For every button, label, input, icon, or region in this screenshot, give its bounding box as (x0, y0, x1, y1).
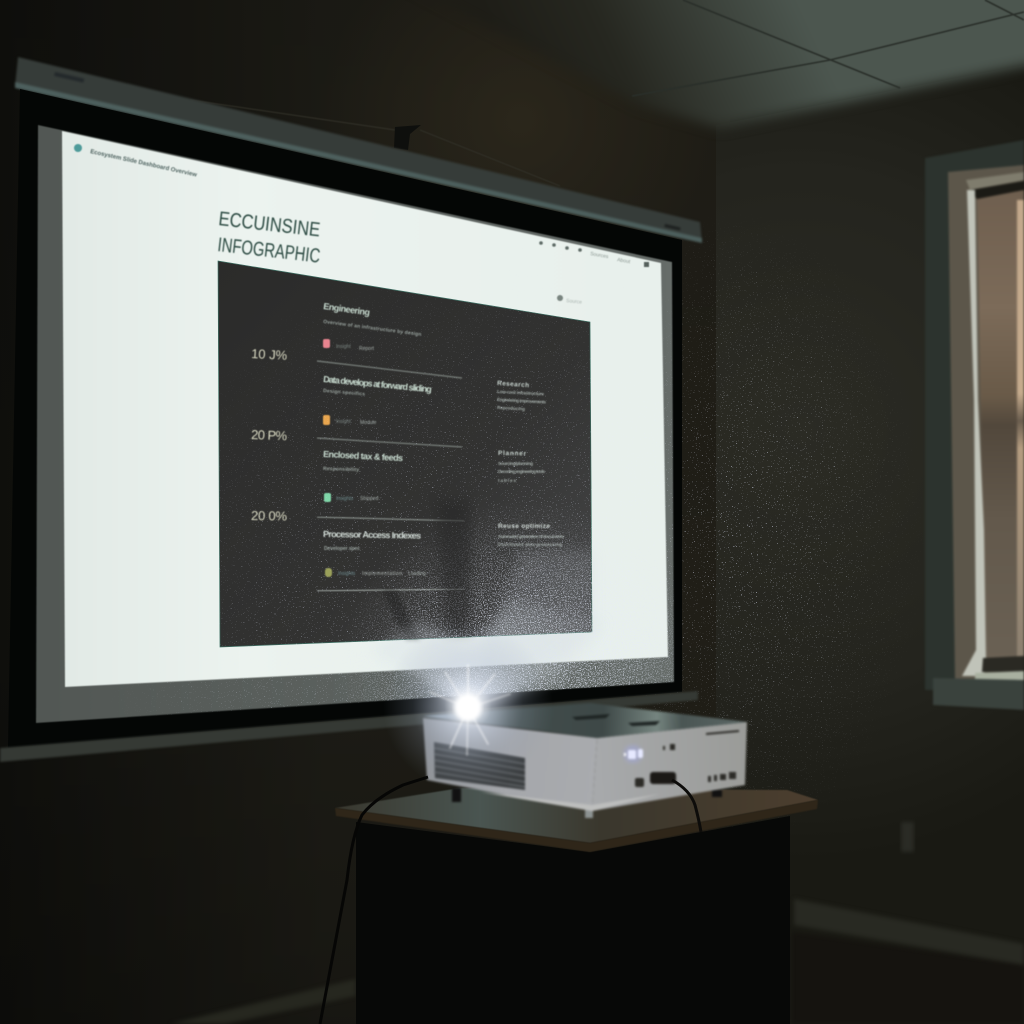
screen: roller case (15, 57, 702, 243)
power cable right (672, 780, 701, 832)
projector: top (423, 703, 748, 738)
panel tag: Source (566, 298, 582, 306)
table (335, 788, 818, 1024)
panel: right column note 1: Low-cost infrastructure (497, 389, 545, 396)
panel: row 3: Shipped (360, 496, 379, 502)
panel: right column note 1: Research (497, 380, 529, 389)
panel: row 3 (323, 449, 403, 502)
panel: left percentages: 20 P% (251, 427, 288, 443)
panel: divider 4 (317, 589, 464, 591)
panel: row 1: Report (359, 346, 375, 352)
panel: row 4: Insights (338, 571, 356, 577)
panel: row 2 (323, 374, 432, 426)
light beam fan (370, 550, 610, 708)
panel: row 4: Processor Access Indexes (323, 529, 421, 541)
panel: row 2: Insight (336, 419, 351, 425)
panel: right column note 1 (497, 380, 547, 411)
page title: ECCUINSINE (217, 208, 321, 242)
panel: row 4 (323, 529, 426, 577)
ceiling with tile grid (380, 0, 1024, 128)
panel: row 2: Module (360, 420, 377, 426)
page nav (539, 241, 649, 267)
projector (423, 703, 748, 818)
panel tag (557, 295, 582, 306)
projector: status LEDs (624, 745, 643, 763)
panel: right column note 1: Engineering improvements (497, 397, 547, 405)
projector: rear ports (635, 730, 739, 787)
table: front edge (335, 800, 818, 852)
lens flare (383, 621, 553, 791)
panel: row 1: Insight (336, 344, 351, 350)
table: cabinet base (356, 816, 790, 1024)
table: top (335, 788, 818, 843)
projector: feet (452, 788, 722, 818)
dark data panel (218, 261, 592, 647)
window: sill (933, 678, 1024, 710)
panel: right column note 2: Decoding engineering tools (498, 469, 545, 474)
panel: row 4: Loading (408, 571, 426, 577)
projector: bottom lip (480, 792, 660, 811)
panel: right column note 3: Distributed data processing (498, 542, 562, 547)
screen: grey surface (36, 125, 674, 723)
screen: lower bar (0, 691, 698, 762)
window: head rail (966, 172, 1024, 199)
panel: row 2: Design specifics (323, 388, 365, 398)
window: bottom rail (982, 656, 1024, 672)
left wall (0, 0, 730, 1024)
window: white strip (962, 190, 986, 676)
page nav: Sources (590, 251, 609, 260)
panel: row 2: Data develops at forward sliding (323, 374, 432, 394)
panel: row 1: Overview of an infrastructure by design (323, 319, 422, 338)
wall outlet (901, 822, 914, 852)
right wall (716, 65, 1024, 1024)
panel: divider 2 (317, 438, 462, 447)
panel: left percentages: 20 0% (251, 508, 288, 524)
panel: row 3: Responsibility (323, 466, 359, 473)
panel: right column note 2: Planner (498, 450, 527, 457)
panel: right column note 2 (498, 450, 545, 483)
panel: right column note 3: Automated generation of documents (498, 534, 564, 539)
panel: row 4: Implementation (362, 571, 402, 577)
projector: top slits (572, 714, 660, 726)
power cable left (320, 777, 428, 1024)
panel: right column note 3 (498, 523, 564, 547)
panel: left percentages: 10 J% (251, 346, 288, 363)
projector: right face (592, 722, 747, 811)
dust stippling on projected panel (124, 288, 674, 716)
mounting bracket and cables (190, 100, 560, 186)
panel: right column note 2: tables (498, 478, 516, 483)
speckled dust on walls (620, 224, 917, 826)
panel: divider 3 (317, 517, 464, 521)
panel: right column note 2: Sourcing/planning (498, 461, 533, 466)
panel: left percentages (251, 346, 288, 524)
window (925, 140, 1024, 710)
panel: row 4: Developer spec (324, 546, 360, 552)
panel: row 1: Engineering (323, 301, 371, 318)
projection screen (0, 57, 702, 762)
page title: INFOGRAPHIC (216, 234, 321, 268)
projector: left face (423, 718, 597, 811)
projector: vent grille (434, 742, 525, 790)
screen: black border (8, 89, 682, 748)
panel: divider 1 (317, 361, 462, 378)
screen: projected white page (62, 131, 668, 687)
page nav: About (617, 257, 631, 265)
panel: row 3: Enclosed tax & feeds (323, 449, 403, 463)
page title (216, 208, 321, 268)
panel: right column note 3: Reuse optimize (498, 523, 550, 530)
window: inner casing (948, 165, 1024, 680)
window: roller blind (977, 182, 1024, 670)
baseboards and floor (170, 899, 1024, 1024)
panel: row 3: Insights (336, 496, 354, 502)
panel: right column note 1: Reproducing (497, 405, 525, 411)
window: outer trim (925, 140, 1024, 690)
panel: row 1 (323, 301, 422, 352)
page header: Ecosystem Slide Dashboard Overview (90, 149, 198, 179)
